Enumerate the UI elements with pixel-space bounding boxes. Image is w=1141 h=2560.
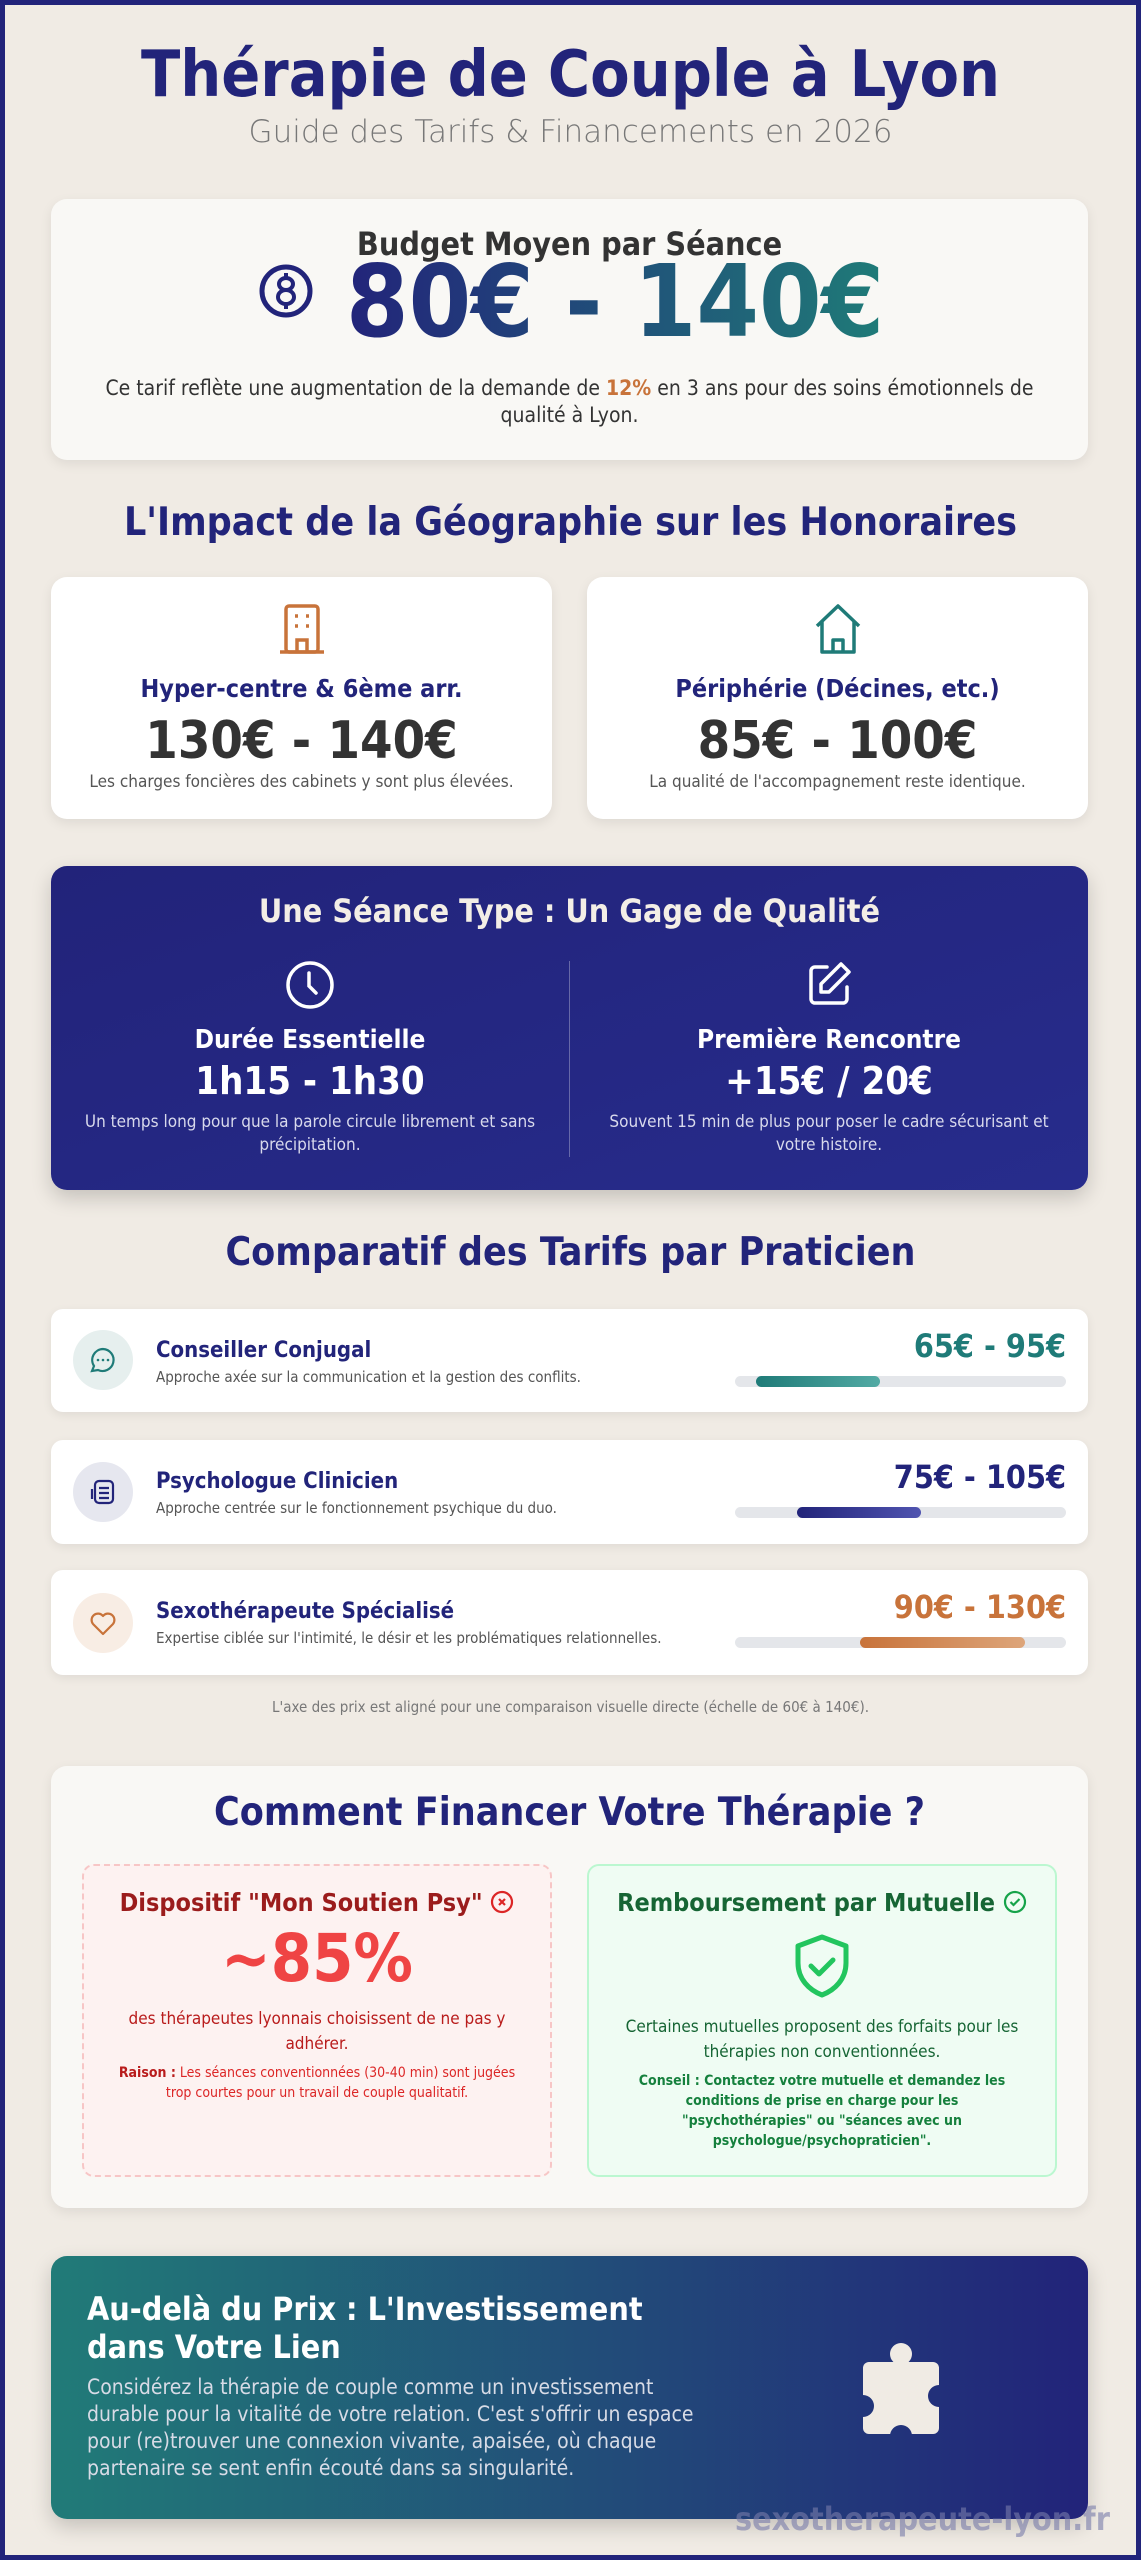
column: durée: Durée Essentielle bbox=[195, 1025, 425, 1055]
row: psychologue: Psychologue Clinicien bbox=[156, 1469, 398, 1494]
body text: Considérez la thérapie de couple comme un investissement durable pour la vitalité de votre relation. C'est s'offrir un espace pour (re)trouver une connexion vivante, apaisée, où chaque partenaire se sent enfin écouté dans sa singularité. bbox=[87, 2375, 694, 2480]
title: Thérapie de Couple à Lyon bbox=[141, 38, 1000, 112]
icon: shield bbox=[796, 1934, 848, 1998]
subtitle: Guide des Tarifs & Financements en 2026 bbox=[249, 114, 892, 150]
column: durée: Un temps long pour que la parole circule librement et sans précipitation. bbox=[85, 1112, 535, 1155]
panel: séance type bbox=[51, 866, 1088, 1190]
panel: investissement bbox=[51, 2256, 1088, 2519]
bar bbox=[735, 1376, 1066, 1387]
box: mon soutien psy: ~85% bbox=[221, 1920, 413, 1997]
heading: Une Séance Type : Un Gage de Qualité bbox=[259, 892, 880, 930]
icon: coin bbox=[260, 264, 312, 318]
icon: house bbox=[816, 604, 860, 654]
box: mon soutien psy: Raison : Les séances conventionnées (30-40 min) sont jugées trop courtes pour un travail de couple qualitatif. bbox=[119, 2065, 515, 2101]
row: sexothérapeute: Expertise ciblée sur l'intimité, le désir et les problématiques relationnelles. bbox=[156, 1629, 662, 1647]
price: 85€ - 100€ bbox=[698, 711, 977, 771]
note: Les charges foncières des cabinets y sont plus élevées. bbox=[89, 772, 514, 792]
heading: geography: L'Impact de la Géographie sur les Honoraires bbox=[124, 500, 1017, 545]
panel: hyper-centre bbox=[51, 577, 552, 819]
panel: budget bbox=[51, 199, 1088, 460]
box: mutuelle bbox=[587, 1864, 1057, 2177]
watermark: sexotherapeute-lyon.fr bbox=[735, 2500, 1110, 2538]
price: 75€ - 105€ bbox=[894, 1458, 1066, 1496]
box: mon soutien psy bbox=[82, 1864, 552, 2177]
big price: 80€ - 140€ bbox=[346, 243, 884, 360]
price: 65€ - 95€ bbox=[914, 1327, 1066, 1365]
box: mon soutien psy: Dispositif "Mon Soutien Psy" bbox=[120, 1888, 483, 1917]
icon: heart bbox=[73, 1593, 133, 1653]
icon: edit bbox=[809, 962, 851, 1005]
row: psychologue bbox=[51, 1440, 1088, 1544]
row: sexothérapeute: Sexothérapeute Spécialisé bbox=[156, 1599, 454, 1624]
icon: clock bbox=[286, 961, 334, 1009]
box: mon soutien psy: des thérapeutes lyonnais choisissent de ne pas y adhérer. bbox=[128, 2009, 505, 2054]
box: mutuelle: Certaines mutuelles proposent des forfaits pour les thérapies non conventionnées. bbox=[626, 2017, 1018, 2062]
column: première rencontre: Souvent 15 min de plus pour poser le cadre sécurisant et votre histoire. bbox=[609, 1112, 1049, 1155]
heading: Comment Financer Votre Thérapie ? bbox=[214, 1790, 925, 1835]
row: conseiller: Conseiller Conjugal bbox=[156, 1338, 371, 1363]
column: première rencontre: Première Rencontre bbox=[697, 1025, 961, 1055]
box: mutuelle: Conseil : Contactez votre mutuelle et demandez les conditions de prise en charge pour les "psychothérapies" ou "séances avec un psychologue/psychopraticien". bbox=[639, 2073, 1005, 2149]
column: première rencontre: +15€ / 20€ bbox=[725, 1059, 933, 1103]
footnote: L'axe des prix est aligné pour une comparaison visuelle directe (échelle de 60€ à 140€). bbox=[272, 1698, 869, 1716]
icon: building bbox=[280, 604, 324, 654]
bar bbox=[735, 1507, 1066, 1518]
heading: Au-delà du Prix : L'Investissement dans Votre Lien bbox=[87, 2290, 643, 2366]
heading: budget: Budget Moyen par Séance bbox=[357, 225, 782, 263]
row: psychologue: Approche centrée sur le fonctionnement psychique du duo. bbox=[156, 1499, 557, 1517]
row: conseiller: Approche axée sur la communication et la gestion des conflits. bbox=[156, 1368, 581, 1386]
row: conseiller bbox=[51, 1309, 1088, 1412]
price: 130€ - 140€ bbox=[145, 711, 458, 771]
panel: périphérie bbox=[587, 577, 1088, 819]
note: La qualité de l'accompagnement reste identique. bbox=[649, 772, 1026, 792]
heading: comparatif: Comparatif des Tarifs par Praticien bbox=[225, 1230, 916, 1275]
price: 90€ - 130€ bbox=[894, 1588, 1066, 1626]
icon: puzzle bbox=[863, 2343, 939, 2434]
box: mutuelle: Remboursement par Mutuelle bbox=[617, 1888, 995, 1917]
column: durée: 1h15 - 1h30 bbox=[195, 1059, 425, 1103]
label: Hyper-centre & 6ème arr. bbox=[140, 674, 463, 703]
panel: financement bbox=[51, 1766, 1088, 2208]
bar bbox=[735, 1637, 1066, 1648]
column: première rencontre bbox=[609, 962, 1049, 1155]
row: sexothérapeute bbox=[51, 1570, 1088, 1675]
icon: chat bbox=[73, 1330, 133, 1390]
label: Périphérie (Décines, etc.) bbox=[675, 674, 1000, 703]
column: durée bbox=[85, 961, 535, 1155]
icon: brain bbox=[73, 1462, 133, 1522]
description: Ce tarif reflète une augmentation de la demande de 12% en 3 ans pour des soins émotionnels de qualité à Lyon. bbox=[105, 376, 1034, 427]
